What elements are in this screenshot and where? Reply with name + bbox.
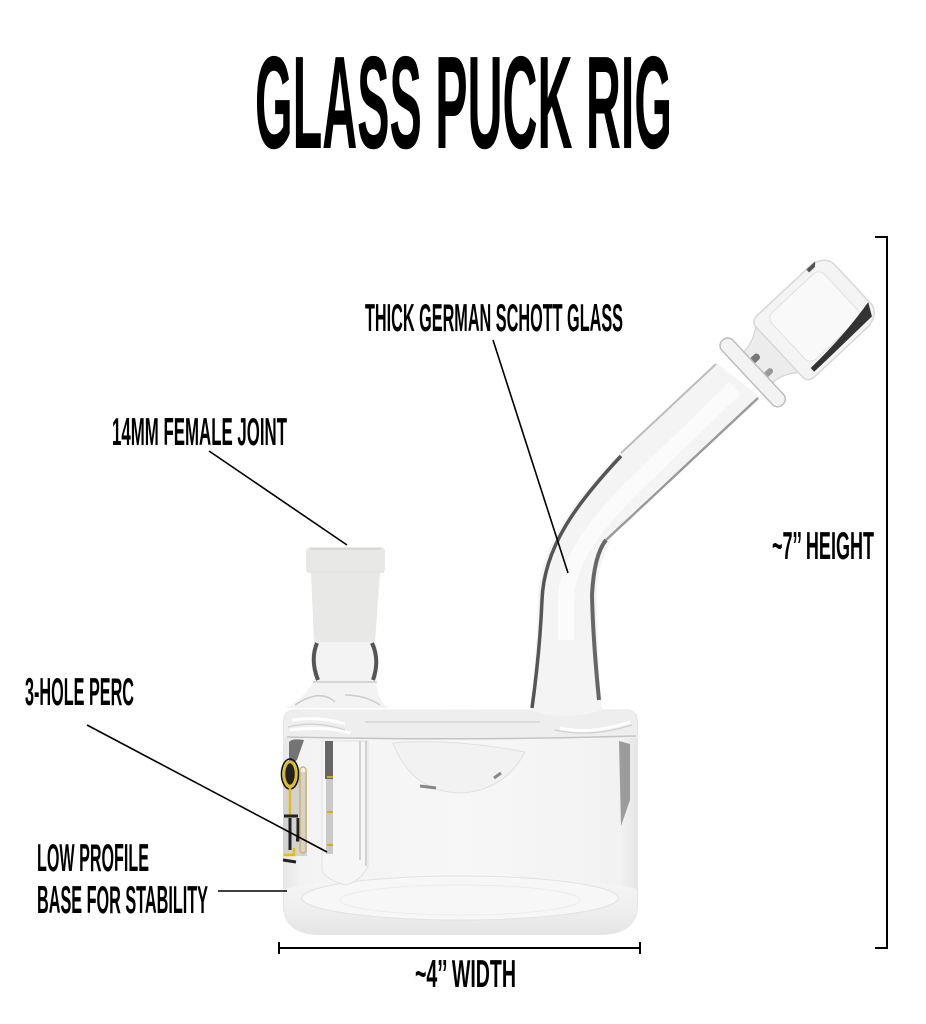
- frosted female joint: [306, 547, 385, 642]
- dark right wall reflection: [619, 741, 630, 826]
- stem and mouthpiece: [530, 253, 881, 716]
- joint neck: [286, 642, 388, 708]
- base body: [283, 709, 638, 935]
- bowl: [751, 253, 881, 383]
- dimension: height: [772, 237, 887, 948]
- perc tube: [322, 741, 368, 885]
- product: glass puck rig: [282, 253, 881, 935]
- neck between ring and bowl: [717, 315, 809, 410]
- dimple: [393, 742, 525, 793]
- dimension: width: [279, 942, 640, 996]
- logo: yellow and black: [282, 759, 307, 862]
- ring: [717, 335, 788, 410]
- dimension: width: ~4’’ WIDTH: [415, 953, 516, 996]
- callout: low profile base: LOW PROFILE: [37, 837, 149, 880]
- callout: 14mm female joint: 14MM FEMALE JOINT: [112, 411, 287, 454]
- foot of base: [284, 877, 637, 935]
- callout: 3-hole perc: 3-HOLE PERC: [25, 671, 134, 714]
- callout: thick german schott glass: [365, 297, 623, 573]
- callout: low profile base: BASE FOR STABILITY: [37, 879, 208, 922]
- callout: 14mm female joint: [112, 411, 347, 545]
- callout: low profile base: [37, 837, 287, 922]
- callout: 3-hole perc: [25, 671, 327, 852]
